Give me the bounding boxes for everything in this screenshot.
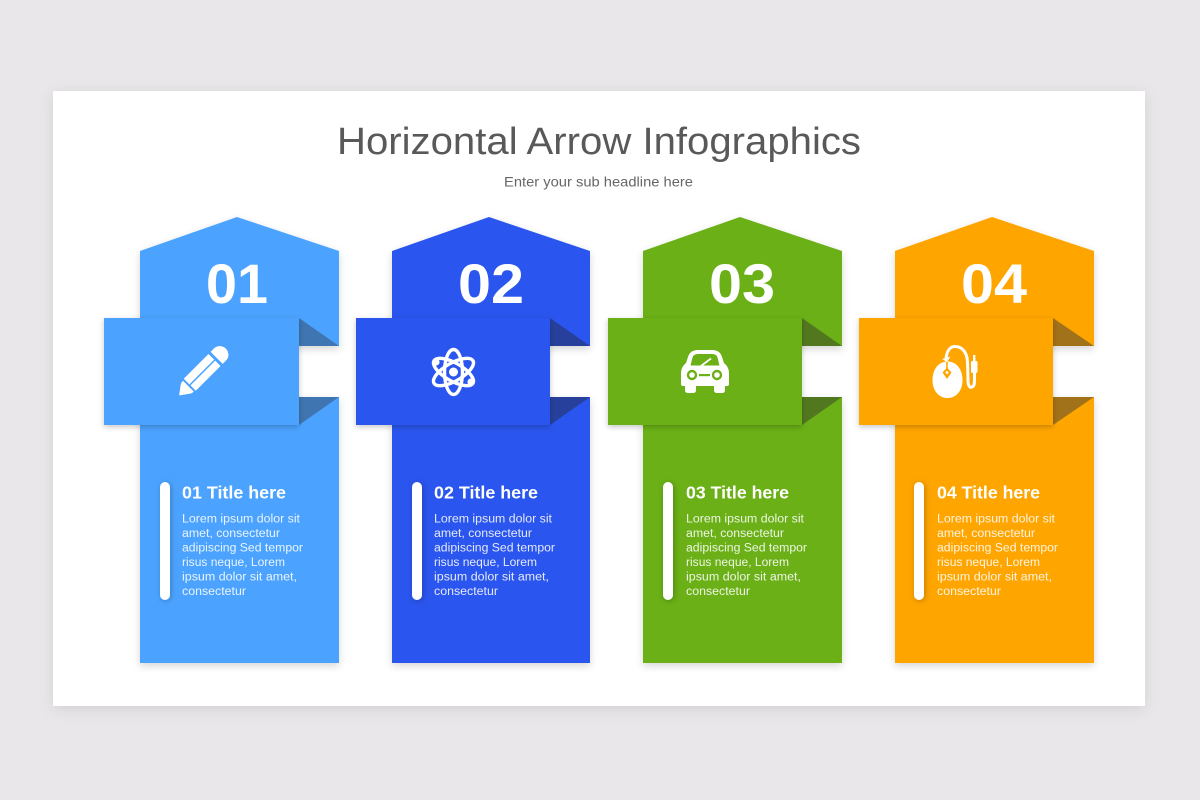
column 01 ribbon band bbox=[104, 318, 299, 425]
column 04 ribbon band bbox=[859, 318, 1053, 425]
column 03 arrow body bbox=[643, 217, 842, 663]
column 02 ribbon band bbox=[356, 318, 550, 425]
column 02 arrow body bbox=[392, 217, 590, 663]
icon: computer mouse bbox=[932, 346, 978, 398]
column 04 heading: 04 Title here bbox=[937, 482, 1040, 502]
column 04 fold shadows bbox=[1053, 318, 1094, 425]
column 02 heading: 02 Title here bbox=[434, 482, 538, 502]
column 04 body text: ipsum dolor sit amet, bbox=[937, 572, 1052, 584]
column 04 body text bbox=[937, 514, 1058, 598]
column 01 accent bar bbox=[160, 482, 170, 600]
column 03 body text: ipsum dolor sit amet, bbox=[686, 572, 801, 584]
background card bbox=[53, 91, 1145, 706]
column 01 arrow body bbox=[140, 217, 339, 663]
subtitle: Enter your sub headline here bbox=[504, 174, 693, 190]
column 01 body text: adipiscing Sed tempor bbox=[182, 542, 303, 554]
column 03 body text: consectetur bbox=[686, 586, 750, 598]
column 01 body text bbox=[182, 514, 303, 598]
icon: pencil bbox=[173, 343, 232, 401]
column 02 body text: adipiscing Sed tempor bbox=[434, 542, 555, 554]
column 02 body text: amet, consectetur bbox=[434, 528, 532, 540]
column 01 body text: Lorem ipsum dolor sit bbox=[182, 514, 301, 526]
column 04 body text: amet, consectetur bbox=[937, 528, 1035, 540]
column 04 body text: Lorem ipsum dolor sit bbox=[937, 514, 1056, 526]
column 03 number: 03 bbox=[709, 252, 775, 315]
column 01 number: 01 bbox=[206, 252, 268, 315]
title: Horizontal Arrow Infographics bbox=[337, 121, 861, 163]
column 03 body text: risus neque, Lorem bbox=[686, 557, 789, 569]
column 04 arrow body bbox=[895, 217, 1094, 663]
panel: column 01 bbox=[104, 217, 339, 663]
icon: car bbox=[681, 350, 729, 393]
column 03 heading: 03 Title here bbox=[686, 482, 789, 502]
column 01 body text: consectetur bbox=[182, 586, 246, 598]
column 01 heading: 01 Title here bbox=[182, 482, 286, 502]
column 02 body text: consectetur bbox=[434, 586, 498, 598]
column 01 fold shadows bbox=[299, 318, 339, 425]
column 04 body text: adipiscing Sed tempor bbox=[937, 542, 1058, 554]
column 03 body text: Lorem ipsum dolor sit bbox=[686, 514, 805, 526]
column 01 body text: amet, consectetur bbox=[182, 528, 280, 540]
icon: atom bbox=[430, 350, 477, 394]
column 02 body text: ipsum dolor sit amet, bbox=[434, 572, 549, 584]
column 01 body text: risus neque, Lorem bbox=[182, 557, 285, 569]
column 04 body text: consectetur bbox=[937, 586, 1001, 598]
panel: column 03 bbox=[608, 217, 842, 663]
column 03 accent bar bbox=[663, 482, 673, 600]
column 02 body text bbox=[434, 514, 555, 598]
column 02 fold shadows bbox=[550, 318, 590, 425]
panel: column 02 bbox=[356, 217, 590, 663]
column 03 body text bbox=[686, 514, 807, 598]
panel: column 04 bbox=[859, 217, 1094, 663]
column 02 body text: risus neque, Lorem bbox=[434, 557, 537, 569]
column 01 body text: ipsum dolor sit amet, bbox=[182, 572, 297, 584]
column 03 ribbon band bbox=[608, 318, 802, 425]
column 02 body text: Lorem ipsum dolor sit bbox=[434, 514, 553, 526]
column 03 fold shadows bbox=[802, 318, 842, 425]
column 02 accent bar bbox=[412, 482, 422, 600]
column 04 accent bar bbox=[914, 482, 924, 600]
column 02 number: 02 bbox=[458, 252, 524, 315]
column 04 body text: risus neque, Lorem bbox=[937, 557, 1040, 569]
column 04 number: 04 bbox=[961, 252, 1027, 315]
column 03 body text: adipiscing Sed tempor bbox=[686, 542, 807, 554]
column 03 body text: amet, consectetur bbox=[686, 528, 784, 540]
